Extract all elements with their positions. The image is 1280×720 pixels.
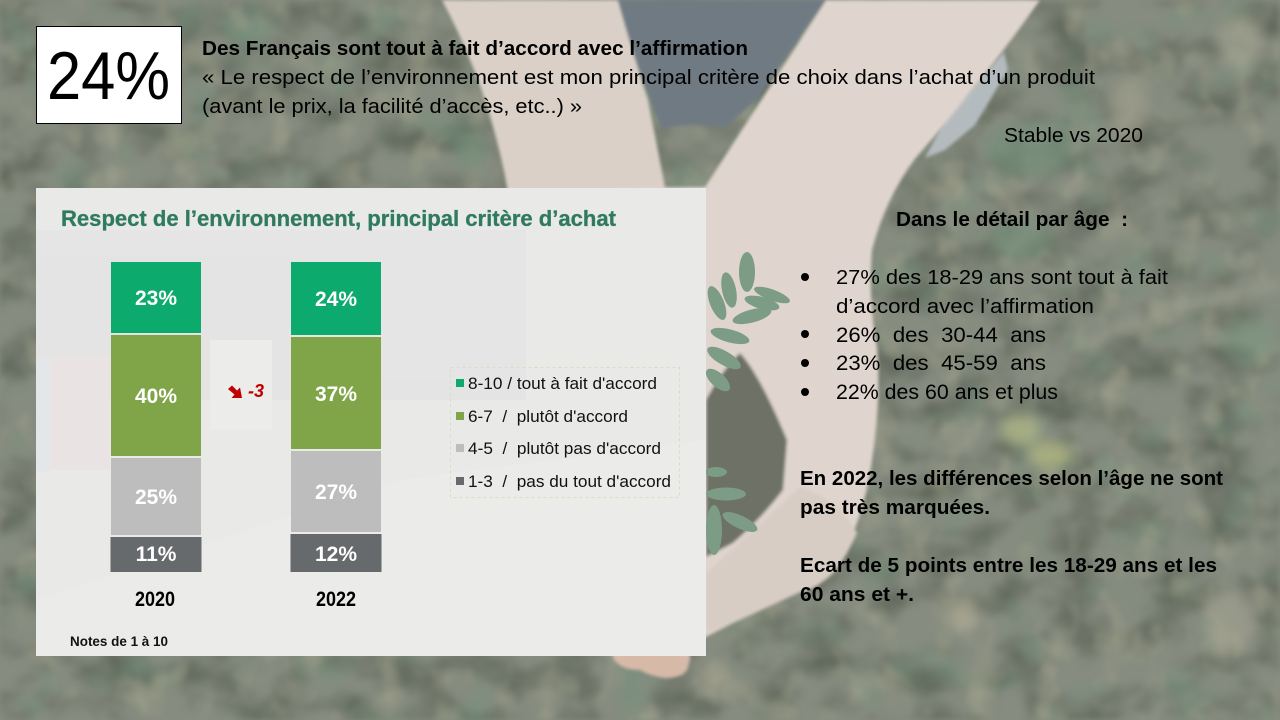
- legend: 8-10 / tout à fait d'accord: [468, 375, 657, 393]
- bar: 2022: 37%: [315, 383, 357, 406]
- legend: 4-5 / plutôt pas d'accord: [468, 440, 661, 458]
- legend: 6-7 / plutôt d'accord: [468, 408, 628, 426]
- headline statement: [202, 38, 1095, 118]
- change indicator: -3: [228, 381, 264, 401]
- age detail list: 23% des 45-59 ans: [836, 352, 1046, 375]
- bar: 2020: 23%: [135, 287, 177, 310]
- headline statement: « Le respect de l’environnement est mon principal critère de choix dans l’achat d’un produit: [202, 67, 1095, 89]
- conclusion: age differences: En 2022, les différences selon l’âge ne sont: [800, 468, 1223, 490]
- seedling leaves: [702, 252, 792, 555]
- conclusion: age differences: [800, 468, 1223, 519]
- faded panel backdrop: [36, 230, 706, 656]
- bar: 2020: 40%: [135, 385, 177, 408]
- conclusion: age gap: Ecart de 5 points entre les 18-29 ans et les: [800, 555, 1217, 577]
- panel: stacked bar chart: [36, 188, 706, 656]
- age detail list: 22% des 60 ans et plus: [836, 381, 1058, 404]
- year label: 2022: 2022: [316, 588, 356, 611]
- change indicator: -3: -3: [248, 381, 264, 401]
- jeans: [612, 0, 826, 130]
- scale note: Notes de 1 à 10: [70, 633, 168, 649]
- stat box: 24%: 24%: [47, 38, 170, 114]
- age detail list: 27% des 18-29 ans sont tout à fait: [836, 267, 1168, 289]
- bar: 2020: 11%: [136, 543, 177, 566]
- year label: 2020: 2020: [135, 588, 175, 611]
- age detail list: d’accord avec l’affirmation: [836, 296, 1094, 318]
- bar: 2022: [290, 262, 382, 572]
- arms and hands: [442, 0, 1040, 678]
- legend: 1-3 / pas du tout d'accord: [468, 473, 671, 491]
- headline statement: Des Français sont tout à fait d’accord avec l’affirmation: [202, 38, 748, 60]
- trend note: Stable vs 2020: [1004, 125, 1143, 147]
- bar: 2022: 12%: [315, 543, 357, 566]
- age detail heading: Dans le détail par âge :: [896, 209, 1128, 231]
- age detail list: [801, 267, 1168, 404]
- bar: 2020: 25%: [135, 486, 177, 509]
- conclusion: age differences: pas très marquées.: [800, 497, 990, 519]
- bar: 2022: 27%: [315, 481, 357, 504]
- age detail list: 26% des 30-44 ans: [836, 324, 1046, 347]
- chart title: Respect de l’environnement, principal critère d’achat: [61, 206, 617, 231]
- conclusion: age gap: 60 ans et +.: [800, 584, 914, 606]
- bar: 2022: 24%: [315, 288, 357, 311]
- bar: 2020: [110, 262, 202, 572]
- legend: [450, 368, 680, 498]
- conclusion: age gap: [800, 555, 1217, 606]
- headline statement: (avant le prix, la facilité d’accès, etc..) »: [202, 96, 582, 118]
